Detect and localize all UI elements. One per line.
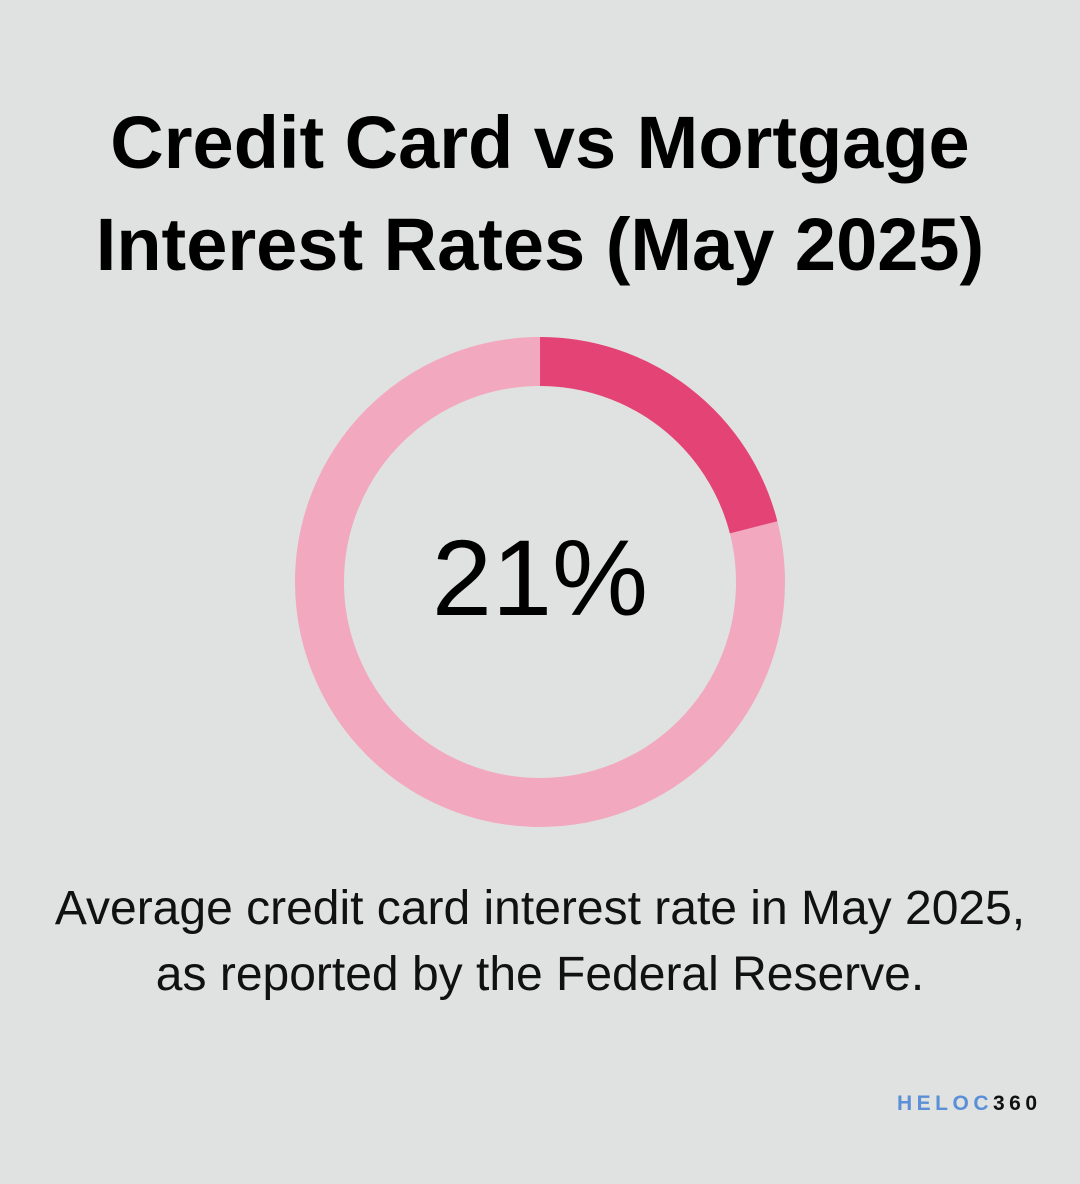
caption: as reported by the Federal Reserve. — [156, 948, 924, 1001]
title — [96, 101, 984, 286]
caption — [55, 882, 1025, 1001]
title: Interest Rates (May 2025) — [96, 203, 984, 286]
title: Credit Card vs Mortgage — [110, 101, 970, 184]
logo: HELOC360 — [897, 1092, 1042, 1115]
donut chart: 21% — [432, 517, 648, 638]
caption: Average credit card interest rate in May 2025, — [55, 882, 1025, 935]
